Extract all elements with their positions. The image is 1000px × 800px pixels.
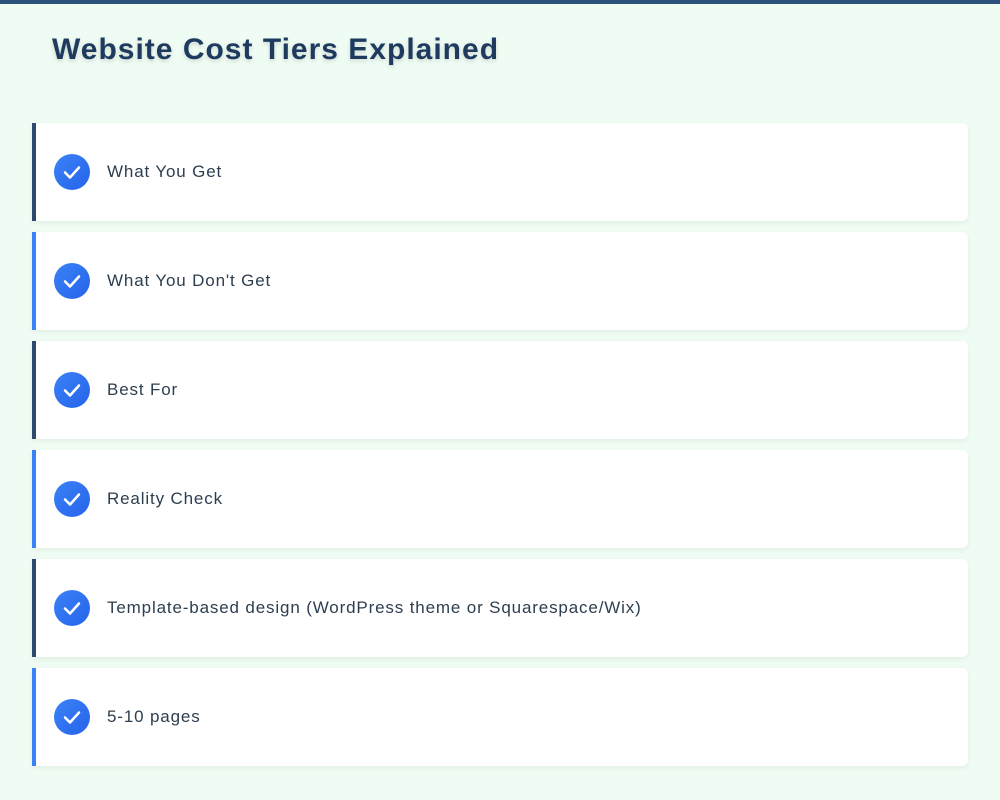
card: 5-10 pages: 5-10 pages <box>107 707 201 726</box>
card: what you don't get: What You Don't Get <box>107 271 271 290</box>
card: what you get <box>32 123 968 221</box>
card: reality check: Reality Check <box>107 489 223 508</box>
icon: check <box>54 699 90 735</box>
icon: check <box>54 154 90 190</box>
card: what you get: What You Get <box>107 162 222 181</box>
card: best for <box>32 341 968 439</box>
title: Website Cost Tiers Explained <box>52 33 499 66</box>
card: template-based design <box>32 559 968 657</box>
card: best for: Best For <box>107 380 178 399</box>
card: reality check <box>32 450 968 548</box>
card: 5-10 pages <box>32 668 968 766</box>
icon: check <box>54 372 90 408</box>
icon: check <box>54 481 90 517</box>
card: template-based design: Template-based design (WordPress theme or Squarespace/Wix) <box>107 598 642 617</box>
icon: check <box>54 590 90 626</box>
icon: check <box>54 263 90 299</box>
card: what you don't get <box>32 232 968 330</box>
